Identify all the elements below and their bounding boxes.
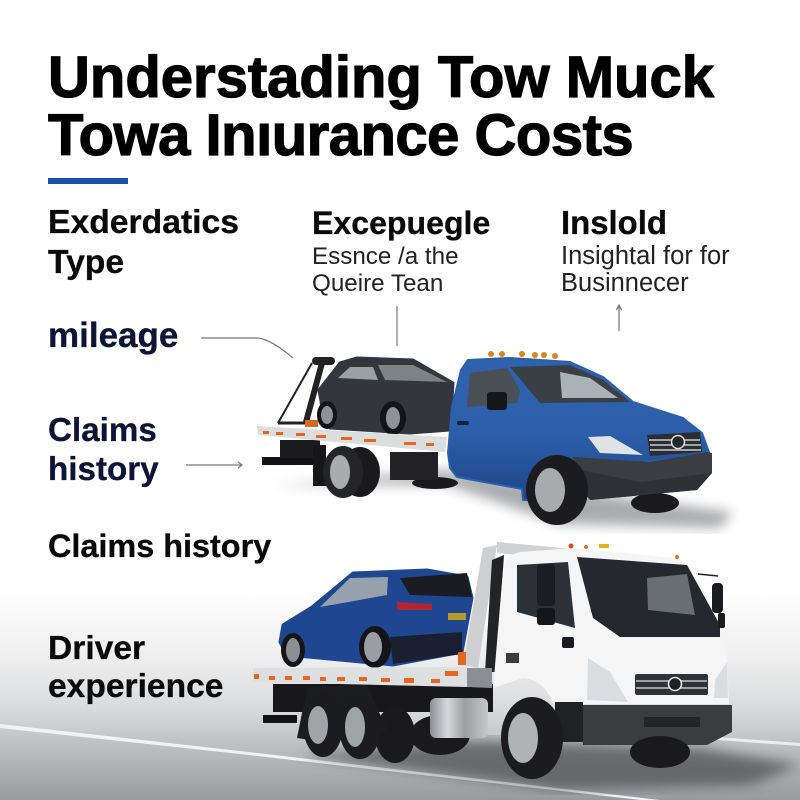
blue tow truck: [257, 351, 733, 528]
white tow truck: [253, 542, 800, 790]
cab: [493, 548, 729, 704]
road: [0, 590, 800, 800]
grille: [647, 432, 702, 456]
car on bed: [319, 358, 453, 433]
chassis: [262, 457, 314, 465]
flatbed: [253, 667, 467, 687]
grille: [635, 674, 708, 695]
title: [48, 45, 716, 168]
label: driver experience: Driver: [48, 630, 145, 667]
heading: middle column: Excepuegle: [312, 205, 490, 241]
label: driver experience: [48, 630, 223, 705]
headlight: [588, 436, 643, 455]
amber lights: [488, 351, 558, 359]
label: claims history 2: Claims history: [48, 528, 271, 564]
shadow: [275, 470, 733, 528]
flatbed: [257, 426, 447, 452]
label: claims history 1: Claims: [48, 412, 157, 449]
label: claims history 1: [48, 412, 159, 488]
text: middle column: Essnce /a the: [312, 243, 459, 270]
text: right column: Insightal for for: [561, 242, 730, 270]
tilt arm: [497, 542, 573, 560]
shadow: [300, 740, 800, 790]
front wheel: [526, 455, 588, 525]
callout: claims history arrow: [186, 462, 242, 468]
callout: middle column line: [396, 306, 398, 346]
label: mileage: mileage: [48, 316, 178, 355]
callout: right column arrow: [616, 305, 622, 331]
label: driver experience: experience: [48, 668, 223, 705]
bumper: [573, 452, 712, 500]
text: right column: [561, 242, 730, 297]
roof markers: [568, 544, 679, 559]
car on bed: [280, 570, 472, 665]
text: right column: Businnecer: [561, 269, 689, 297]
cab: [448, 358, 710, 500]
text: middle column: Queire Tean: [312, 270, 443, 297]
heading: right column: Inslold: [561, 204, 667, 241]
headlights: [587, 658, 628, 702]
heading: left column: [48, 203, 239, 281]
bumper: [555, 702, 583, 742]
title: Towa Inıurance Costs: [48, 103, 633, 168]
heading: left column: Type: [48, 243, 124, 281]
front wheel: [501, 697, 563, 779]
heading: left column: Exderdatics: [48, 203, 239, 241]
wrecker arm: [278, 363, 312, 423]
text: middle column: [312, 243, 459, 297]
accent rule: [48, 178, 128, 184]
label: claims history 1: history: [48, 451, 159, 488]
chassis: [273, 684, 493, 712]
callout: mileage line: [201, 338, 293, 358]
title: Understading Tow Muck: [48, 45, 714, 110]
